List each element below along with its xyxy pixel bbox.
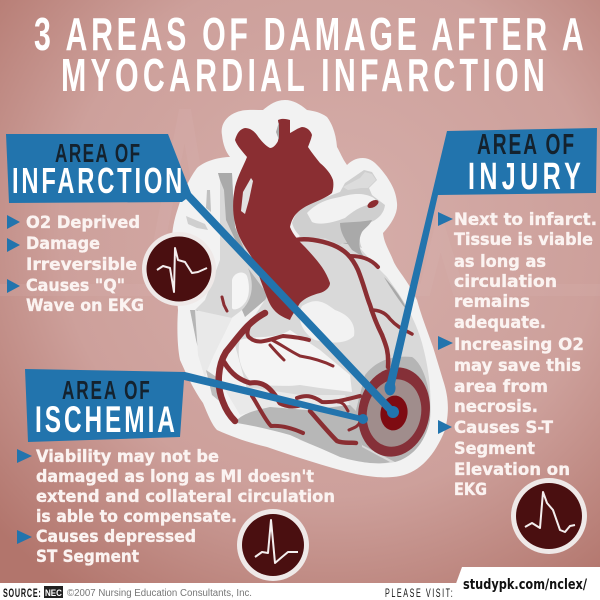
injury bullets: remains	[454, 292, 530, 311]
infarction bullets: Causes "Q"	[26, 276, 125, 295]
ischemia bullets: Viability may not be	[36, 447, 219, 466]
injury bullets: Next to infarct.	[454, 210, 597, 229]
coronary opening	[366, 198, 380, 210]
infarct outer ring	[350, 361, 438, 463]
heart illustration	[172, 100, 448, 477]
title: MYOCARDIAL INFARCTION	[61, 51, 545, 102]
ischemia dot	[358, 414, 368, 424]
ischemia bullets: ST Segment	[36, 547, 139, 566]
left creases	[206, 190, 211, 212]
aorta highlight	[241, 178, 253, 214]
flag: infarction	[6, 134, 399, 418]
infarct dot	[387, 406, 399, 418]
ischemia bullets: is able to compensate.	[36, 507, 237, 526]
damage target rings	[350, 361, 438, 463]
injury bullets: adequate.	[454, 313, 546, 332]
injury bullets: area from	[454, 377, 548, 396]
gray halo around target	[356, 357, 430, 462]
infarction bullets: Wave on EKG	[26, 296, 144, 315]
flag: infarction: INFARCTION	[12, 161, 182, 201]
footer	[0, 567, 600, 600]
ischemia bullets: extend and collateral circulation	[36, 487, 335, 506]
footer: NEC	[45, 588, 62, 598]
EKG icon: ischemia	[237, 509, 309, 581]
injury bullets: Increasing O2	[454, 335, 584, 354]
white blob	[232, 273, 249, 309]
ischemia bullets: Causes depressed	[36, 527, 196, 546]
infarct core	[378, 394, 410, 432]
flag: injury	[384, 128, 597, 396]
infarction bullets	[7, 213, 144, 315]
title	[34, 10, 584, 102]
right edge shadow	[384, 277, 407, 310]
left gray band	[195, 173, 268, 323]
heart halo	[172, 100, 448, 477]
atrium dark fold	[340, 220, 372, 258]
injury bullets: as long as	[454, 252, 546, 271]
flag: ischemia	[25, 369, 368, 442]
injury bullets: Tissue is viable	[454, 230, 593, 249]
injury dot	[384, 380, 396, 396]
infarction bullets: O2 Deprived	[26, 213, 140, 232]
flag: injury: AREA OF	[477, 129, 574, 161]
lower gray shadow	[237, 405, 390, 463]
flag: injury: INJURY	[468, 155, 581, 197]
ischemia bullets	[17, 447, 335, 566]
ischemia bullets: damaged as long as MI doesn't	[36, 467, 314, 486]
injury bullets: EKG	[454, 480, 487, 499]
injury bullets: Elevation on	[454, 460, 570, 479]
injury bullets: may save this	[454, 356, 581, 375]
right atrium highlight	[307, 194, 376, 224]
right atrium shadow	[292, 170, 385, 248]
right body	[235, 230, 431, 463]
title: 3 AREAS OF DAMAGE AFTER A	[34, 10, 584, 61]
coronary arteries	[219, 239, 412, 443]
lower body white	[239, 330, 352, 392]
flag: ischemia: AREA OF	[62, 375, 150, 405]
EKG icon: injury	[511, 478, 587, 554]
injury bullets: necrosis.	[454, 397, 538, 416]
infarction bullets: Irreversible	[26, 255, 137, 274]
injury bullets: circulation	[454, 272, 557, 291]
injury bullets: Segment	[454, 439, 535, 458]
injury bullets: Causes S-T	[454, 418, 554, 437]
footer: ©2007 Nursing Education Consultants, Inc.	[67, 588, 252, 599]
aorta and pulmonary trunk	[233, 119, 333, 320]
ischemia ring	[361, 374, 427, 452]
website tab	[450, 567, 600, 600]
infarction bullets: Damage	[26, 234, 100, 253]
EKG icon: infarction	[142, 232, 216, 306]
injury bullets	[438, 210, 597, 499]
logo	[44, 586, 63, 598]
appendage top	[343, 172, 376, 190]
flag: ischemia: ISCHEMIA	[35, 399, 175, 440]
flag: infarction: AREA OF	[55, 138, 140, 168]
